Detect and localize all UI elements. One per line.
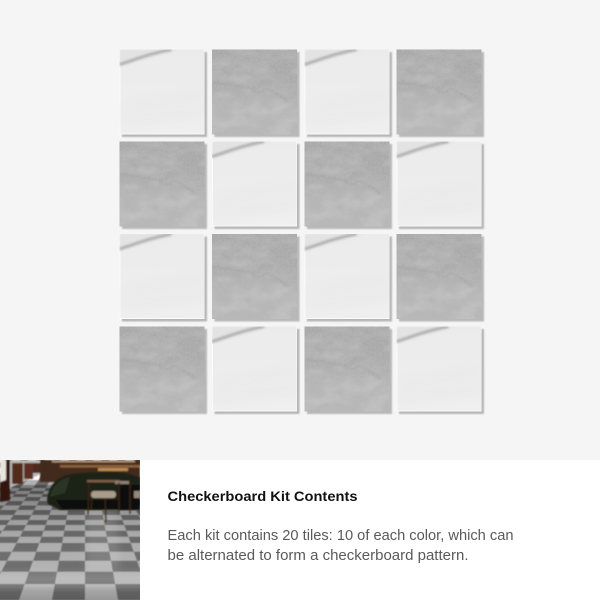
tile row 1: [120, 50, 484, 137]
tile row 4: [120, 326, 484, 414]
bottom info strip background: [0, 460, 600, 600]
tile grid: [120, 50, 485, 415]
tile row 2: [120, 142, 484, 229]
tile row 3: [120, 234, 484, 322]
room furniture: [0, 460, 140, 522]
room photo: checkerboard floor with sofa and chair: [0, 460, 140, 600]
description: Each kit contains 20 tiles: 10 of each color, which can: [168, 528, 514, 544]
description: [168, 528, 514, 564]
checkerboard floor: [0, 415, 316, 600]
text block: kit contents: [168, 488, 514, 564]
heading: Checkerboard Kit Contents: [168, 488, 358, 504]
description: be alternated to form a checkerboard pattern.: [168, 548, 468, 564]
